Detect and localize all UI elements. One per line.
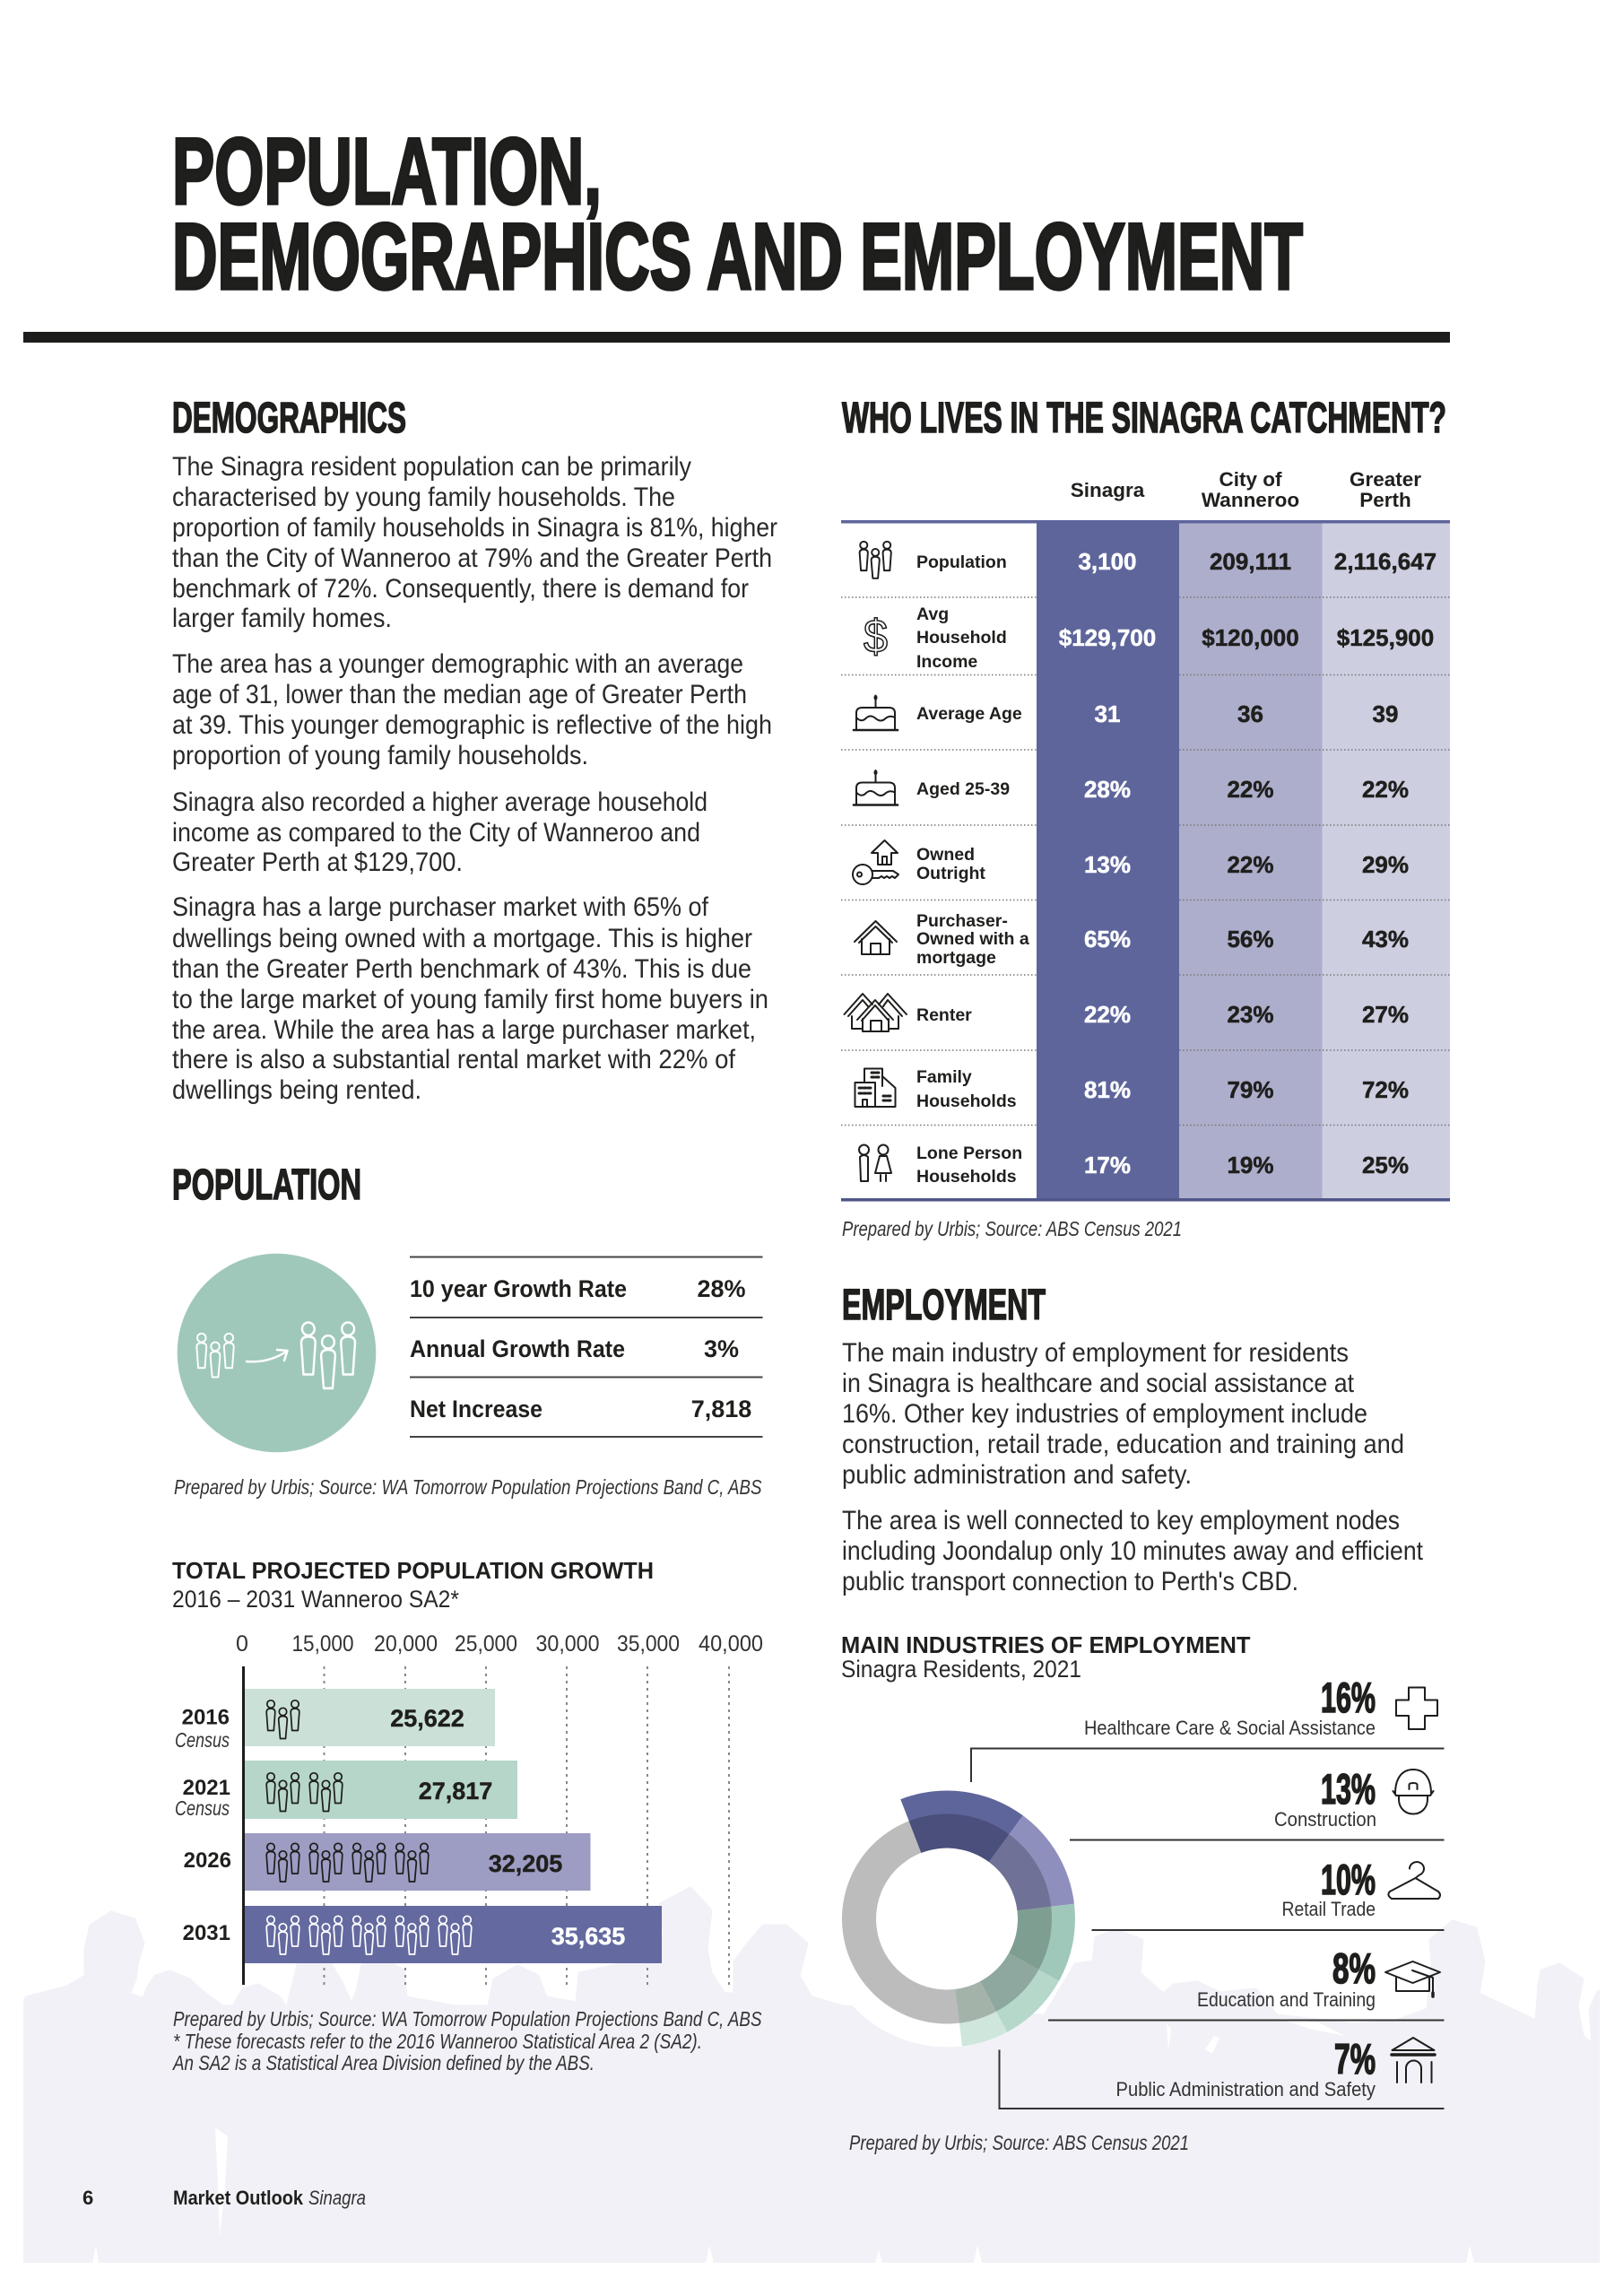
heading: main industries: [841, 1633, 1251, 1683]
industry: construction: [1274, 1765, 1433, 1831]
title: [172, 119, 1303, 309]
slice: retail 10%: [1009, 1904, 1075, 1981]
bar chart: projected population: [175, 1631, 763, 1985]
row: family households: Households: [916, 1091, 1017, 1111]
chart: industries donut: [819, 1790, 1075, 2047]
text block: demographics: larger family homes.: [172, 604, 392, 633]
industry: public administration: [1115, 2035, 1435, 2100]
row: renter: Renter: [916, 1005, 972, 1025]
text block: demographics: The area has a younger demographic with an average: [172, 649, 743, 679]
industry: public administration: Public Administration and Safety: [1115, 2078, 1376, 2100]
bar: 2016: 2016: [182, 1706, 230, 1729]
table header: Wanneroo: [1202, 489, 1299, 511]
heading: demographics: DEMOGRAPHICS: [172, 395, 406, 442]
icon: dollar: $: [864, 611, 888, 663]
panel: growth stats: 3%: [704, 1335, 739, 1362]
industry: construction: Construction: [1274, 1808, 1376, 1831]
row: purchaser-owned: 56%: [1227, 926, 1274, 952]
table header: City of: [1219, 468, 1282, 491]
row: owned outright: 22%: [1227, 851, 1274, 878]
heading: main industries: MAIN INDUSTRIES OF EMPLOYMENT: [841, 1633, 1251, 1658]
row: avg household income: [864, 604, 1434, 672]
text block: employment: The area is well connected to key employment nodes: [842, 1506, 1400, 1535]
row: owned outright: 13%: [1084, 851, 1131, 878]
industry: education: Education and Training: [1197, 1988, 1376, 2011]
row: renter: [845, 994, 1409, 1031]
text block: demographics: [172, 452, 777, 1105]
icon: cake: [854, 770, 898, 805]
text block: employment: [842, 1338, 1424, 1596]
text block: demographics: there is also a substantial rental market with 22% of: [172, 1045, 736, 1074]
row: aged 25-39: Aged 25-39: [916, 779, 1010, 799]
row: average age: Average Age: [916, 704, 1022, 724]
text block: demographics: Sinagra has a large purchaser market with 65% of: [172, 892, 709, 922]
row: avg household income: Income: [916, 652, 977, 672]
row: purchaser-owned: 65%: [1084, 926, 1131, 952]
industry: healthcare: 16%: [1321, 1674, 1376, 1721]
heading: employment: EMPLOYMENT: [842, 1282, 1046, 1329]
icon: houses: [845, 994, 907, 1031]
chart axis labels: 25,000: [455, 1631, 517, 1657]
text block: employment: 16%. Other key industries of employment include: [842, 1399, 1367, 1429]
text block: demographics: to the large market of young family first home buyers in: [172, 985, 768, 1014]
bar: 2026: 2026: [184, 1848, 231, 1873]
text block: demographics: proportion of young family households.: [172, 741, 588, 770]
icon: key and house: [853, 840, 898, 884]
text block: employment: public transport connection to Perth's CBD.: [842, 1567, 1298, 1596]
row: population: 3,100: [1078, 548, 1137, 575]
panel: growth stats: 28%: [697, 1275, 746, 1302]
industry: healthcare: [1084, 1674, 1437, 1739]
row: population: 2,116,647: [1334, 548, 1436, 575]
text block: demographics: The Sinagra resident population can be primarily: [172, 452, 691, 482]
slice: construction 13%: [989, 1815, 1074, 1910]
row: population: 209,111: [1210, 548, 1291, 575]
panel: growth stats: 10 year Growth Rate: [410, 1275, 627, 1302]
text block: employment: public administration and safety.: [842, 1460, 1192, 1490]
industry: public administration: 7%: [1334, 2035, 1376, 2083]
bar: 2031: [183, 1906, 662, 1963]
text block: demographics: proportion of family households in Sinagra is 81%, higher: [172, 513, 777, 543]
heading: population: POPULATION: [172, 1161, 361, 1209]
background: crowd silhouette: [25, 1888, 1598, 2263]
row: average age: 39: [1373, 700, 1398, 727]
panel: growth stats: 7,818: [691, 1396, 751, 1422]
row: lone person households: [859, 1144, 1409, 1187]
text block: employment: construction, retail trade, education and training and: [842, 1430, 1404, 1459]
icon: population growth circle: [178, 1254, 376, 1452]
row: renter: 27%: [1362, 1001, 1409, 1028]
bar: 2031: 35,635: [551, 1923, 625, 1950]
panel: growth stats: Annual Growth Rate: [410, 1335, 625, 1362]
icon: people: [860, 542, 891, 578]
panel: industries list: [971, 1674, 1444, 2109]
chart axis labels: 40,000: [699, 1631, 763, 1657]
row: lone person households: 19%: [1227, 1152, 1274, 1178]
chart axis labels: 0: [236, 1631, 248, 1657]
industry: education: [1197, 1944, 1440, 2011]
icon: graduation cap: [1385, 1961, 1440, 1996]
panel: growth stats: Net Increase: [410, 1396, 542, 1422]
bar: 2016: Census: [175, 1728, 230, 1752]
row: renter: 22%: [1084, 1001, 1131, 1028]
icon: hard hat: [1393, 1770, 1433, 1813]
source: chart notes: [171, 2007, 762, 2074]
source: growth stats: Prepared by Urbis; Source: WA Tomorrow Population Projections Band C, ABS: [174, 1475, 762, 1499]
source: chart notes: * These forecasts refer to the 2016 Wanneroo Statistical Area 2 (SA2).: [173, 2030, 702, 2053]
chart axis labels: 15,000: [292, 1631, 353, 1657]
bar: 2026: [184, 1833, 590, 1891]
industry: retail: Retail Trade: [1282, 1898, 1376, 1920]
icon: buildings: [855, 1069, 895, 1107]
row: owned outright: Outright: [916, 864, 985, 883]
row: purchaser-owned: 43%: [1362, 926, 1409, 952]
icon: civic building: [1392, 2038, 1435, 2083]
text block: employment: in Sinagra is healthcare and social assistance at: [842, 1369, 1355, 1398]
row: family households: 81%: [1084, 1076, 1131, 1103]
row: purchaser-owned: Purchaser-: [916, 911, 1008, 931]
title rule: [23, 332, 1450, 343]
industry: retail: [1282, 1856, 1440, 1920]
icon: clothes hanger: [1388, 1862, 1440, 1899]
icon: man and woman: [859, 1144, 891, 1181]
table header: [1071, 468, 1421, 511]
bar: 2021: 27,817: [419, 1778, 492, 1805]
text block: demographics: Sinagra also recorded a higher average household: [172, 787, 707, 817]
row: avg household income: $120,000: [1202, 624, 1299, 651]
icon: house: [855, 921, 897, 954]
icon: cake: [854, 696, 898, 730]
bar: 2016: 25,622: [390, 1705, 464, 1732]
row: owned outright: 29%: [1362, 851, 1409, 878]
row: lone person households: Households: [916, 1167, 1017, 1187]
row: average age: 36: [1237, 700, 1263, 727]
bar: 2031: 2031: [183, 1921, 230, 1945]
footer: Sinagra: [308, 2187, 366, 2209]
row: lone person households: 17%: [1084, 1152, 1131, 1178]
slice: healthcare 16%: [900, 1790, 1023, 1862]
text block: demographics: Greater Perth at $129,700.: [172, 848, 463, 877]
chart axis labels: 30,000: [536, 1631, 599, 1657]
slice: public admin 7%: [955, 1981, 1007, 2047]
source: chart notes: An SA2 is a Statistical Area Division defined by the ABS.: [171, 2051, 595, 2074]
row: family households: 72%: [1362, 1076, 1409, 1103]
row: avg household income: $129,700: [1059, 624, 1156, 651]
row: aged 25-39: 22%: [1362, 776, 1409, 803]
row: purchaser-owned: Owned with a: [916, 929, 1029, 949]
bar: 2016: [175, 1689, 495, 1752]
text block: employment: including Joondalup only 10 minutes away and efficient: [842, 1536, 1424, 1566]
bar: 2021: 2021: [183, 1776, 230, 1800]
panel: growth stats: [410, 1257, 762, 1437]
row: population: [860, 542, 1436, 578]
panel: catchment table: [841, 468, 1450, 1202]
row: owned outright: [853, 840, 1409, 884]
text block: demographics: than the City of Wanneroo at 79% and the Greater Perth: [172, 544, 772, 573]
source: industries: Prepared by Urbis; Source: ABS Census 2021: [849, 2131, 1189, 2154]
industry: retail: 10%: [1321, 1856, 1376, 1903]
row: aged 25-39: 22%: [1227, 776, 1274, 803]
heading: total projected population growth: 2016 – 2031 Wanneroo SA2*: [172, 1586, 459, 1613]
bar: 2021: Census: [175, 1796, 230, 1820]
row: average age: [854, 696, 1398, 730]
row: aged 25-39: [854, 770, 1409, 805]
row: purchaser-owned: mortgage: [916, 948, 996, 968]
table header: Sinagra: [1071, 479, 1145, 501]
heading: main industries: Sinagra Residents, 2021: [841, 1656, 1081, 1683]
row: family households: Family: [916, 1067, 972, 1087]
text block: demographics: benchmark of 72%. Consequently, there is demand for: [172, 574, 749, 604]
text block: demographics: age of 31, lower than the median age of Greater Perth: [172, 680, 747, 709]
icon: medical cross: [1396, 1688, 1437, 1729]
row: owned outright: Owned: [916, 845, 975, 865]
row: avg household income: Household: [916, 628, 1007, 648]
table column backgrounds: [841, 520, 1450, 1202]
industry: construction: 13%: [1321, 1765, 1376, 1813]
row: average age: 31: [1095, 700, 1120, 727]
chart axis labels: 35,000: [617, 1631, 680, 1657]
row: lone person households: Lone Person: [916, 1144, 1022, 1163]
row: population: Population: [916, 552, 1007, 572]
chart axis labels: 20,000: [374, 1631, 438, 1657]
heading: total projected population growth: [172, 1559, 654, 1613]
slice: education 8%: [980, 1953, 1059, 2032]
text block: demographics: dwellings being rented.: [172, 1075, 421, 1105]
footer: 6: [82, 2187, 93, 2209]
industry: healthcare: Healthcare Care & Social Assistance: [1084, 1717, 1376, 1739]
text block: demographics: dwellings being owned with a mortgage. This is higher: [172, 924, 752, 953]
row: family households: 79%: [1227, 1076, 1274, 1103]
text block: employment: The main industry of employment for residents: [842, 1338, 1349, 1368]
source: chart notes: Prepared by Urbis; Source: WA Tomorrow Population Projections Band C, ABS: [173, 2007, 762, 2031]
text block: demographics: than the Greater Perth benchmark of 43%. This is due: [172, 954, 751, 984]
row: purchaser-owned: [855, 911, 1409, 968]
industry: education: 8%: [1332, 1944, 1376, 1992]
row: avg household income: Avg: [916, 604, 949, 624]
row: renter: 23%: [1227, 1001, 1274, 1028]
text block: demographics: the area. While the area has a large purchaser market,: [172, 1015, 756, 1045]
row: family households: [855, 1067, 1409, 1111]
row: aged 25-39: 28%: [1084, 776, 1131, 803]
row: lone person households: 25%: [1362, 1152, 1409, 1178]
table header: Greater: [1350, 468, 1421, 491]
footer: [82, 2187, 366, 2209]
row: avg household income: $125,900: [1337, 624, 1434, 651]
text block: demographics: characterised by young family households. The: [172, 483, 675, 512]
text block: demographics: at 39. This younger demographic is reflective of the high: [172, 710, 772, 740]
bar: 2021: [175, 1761, 517, 1820]
chart axis labels: [236, 1631, 763, 1657]
bar: 2026: 32,205: [489, 1850, 562, 1877]
table header: Perth: [1359, 489, 1411, 511]
footer: Market Outlook: [173, 2187, 304, 2209]
text block: demographics: income as compared to the City of Wanneroo and: [172, 818, 700, 848]
title: POPULATION,: [172, 119, 602, 224]
source: table: Prepared by Urbis; Source: ABS Census 2021: [842, 1217, 1182, 1240]
heading: total projected population growth: TOTAL PROJECTED POPULATION GROWTH: [172, 1559, 654, 1584]
